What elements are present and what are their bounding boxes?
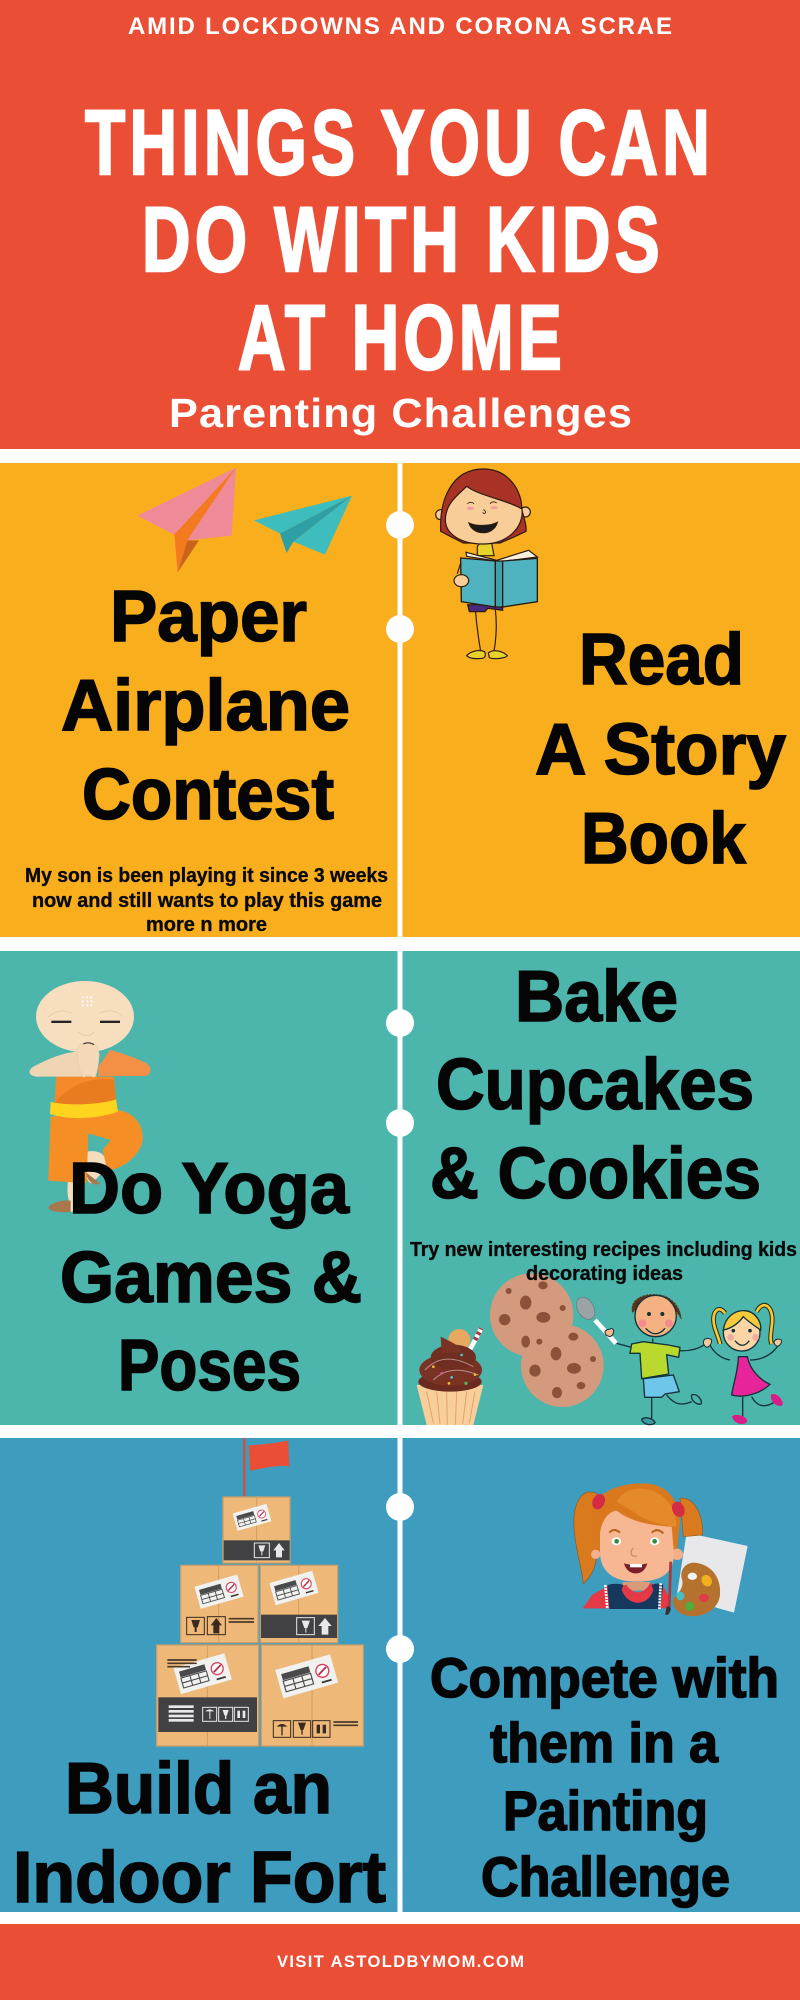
note: my son: more n more: [146, 914, 267, 936]
icon: paper airplanes: [137, 468, 352, 572]
icon: cupcake: [417, 1328, 483, 1425]
heading: Compete with them in a Painting Challenge: them in a: [490, 1711, 719, 1774]
note: try new recipes: decorating ideas: [526, 1263, 683, 1285]
heading: Read A Story Book: [535, 620, 786, 879]
main title: [85, 92, 714, 389]
heading: Compete with them in a Painting Challenge: Painting: [503, 1779, 708, 1842]
heading: Bake Cupcakes and Cookies: [430, 957, 761, 1214]
heading: Compete with them in a Painting Challenge: Challenge: [481, 1845, 730, 1908]
kicker text: AMID LOCKDOWNS AND CORONA SCRAE: [128, 13, 672, 40]
note: try new recipes: Try new interesting recipes including kids: [410, 1239, 797, 1261]
heading: Compete with them in a Painting Challenge: Compete with: [430, 1646, 779, 1709]
footer link text: VISIT ASTOLDBYMOM.COM: [277, 1953, 524, 1971]
panel: blue row: [0, 1438, 800, 1918]
heading: Build an Indoor Fort: Build an: [65, 1749, 332, 1829]
heading: Compete with them in a Painting Challenge: [430, 1646, 779, 1908]
subtitle: Parenting Challenges: [169, 390, 633, 436]
heading: Do Yoga Games and Poses: Do Yoga: [69, 1149, 350, 1229]
icon: girl reading a book: [436, 469, 537, 659]
note: my son: [25, 865, 388, 936]
icon: cardboard box fort: [157, 1438, 363, 1746]
note: try new recipes: [410, 1239, 797, 1285]
heading: Paper Airplane Contest: [61, 577, 350, 835]
flag: [243, 1438, 289, 1507]
note: my son: now and still wants to play this game: [32, 890, 382, 912]
icon: girl with palette and canvas: [574, 1483, 748, 1616]
panel: yellow row: [0, 463, 800, 937]
panel: teal row: [0, 951, 800, 1425]
heading: Bake Cupcakes and Cookies: & Cookies: [430, 1134, 761, 1214]
heading: Do Yoga Games and Poses: Games &: [60, 1238, 362, 1318]
main title: AT HOME: [238, 287, 566, 389]
heading: Bake Cupcakes and Cookies: Cupcakes: [436, 1045, 754, 1125]
icon: cookies: [490, 1273, 604, 1407]
heading: Do Yoga Games and Poses: [60, 1149, 362, 1406]
heading: Build an Indoor Fort: [13, 1749, 386, 1918]
icon: boy with whisk: [573, 1294, 705, 1425]
icon: yoga monk: [30, 981, 150, 1212]
illustration: cupcake, cookies and kids: [417, 1273, 782, 1425]
header banner: [0, 0, 800, 449]
heading: Paper Airplane Contest: Paper: [110, 577, 307, 657]
icon: girl in pink dress: [703, 1305, 782, 1423]
heading: Paper Airplane Contest: Airplane: [61, 666, 350, 746]
heading: Read A Story Book: Read: [579, 620, 744, 700]
heading: Read A Story Book: A Story: [535, 710, 786, 790]
heading: Do Yoga Games and Poses: Poses: [118, 1326, 301, 1406]
note: my son: My son is been playing it since 3 weeks: [25, 865, 388, 887]
heading: Build an Indoor Fort: Indoor Fort: [13, 1838, 386, 1918]
heading: Paper Airplane Contest: Contest: [82, 755, 334, 835]
heading: Bake Cupcakes and Cookies: Bake: [515, 957, 678, 1037]
footer banner: [0, 1924, 800, 2000]
heading: Read A Story Book: Book: [581, 799, 747, 879]
